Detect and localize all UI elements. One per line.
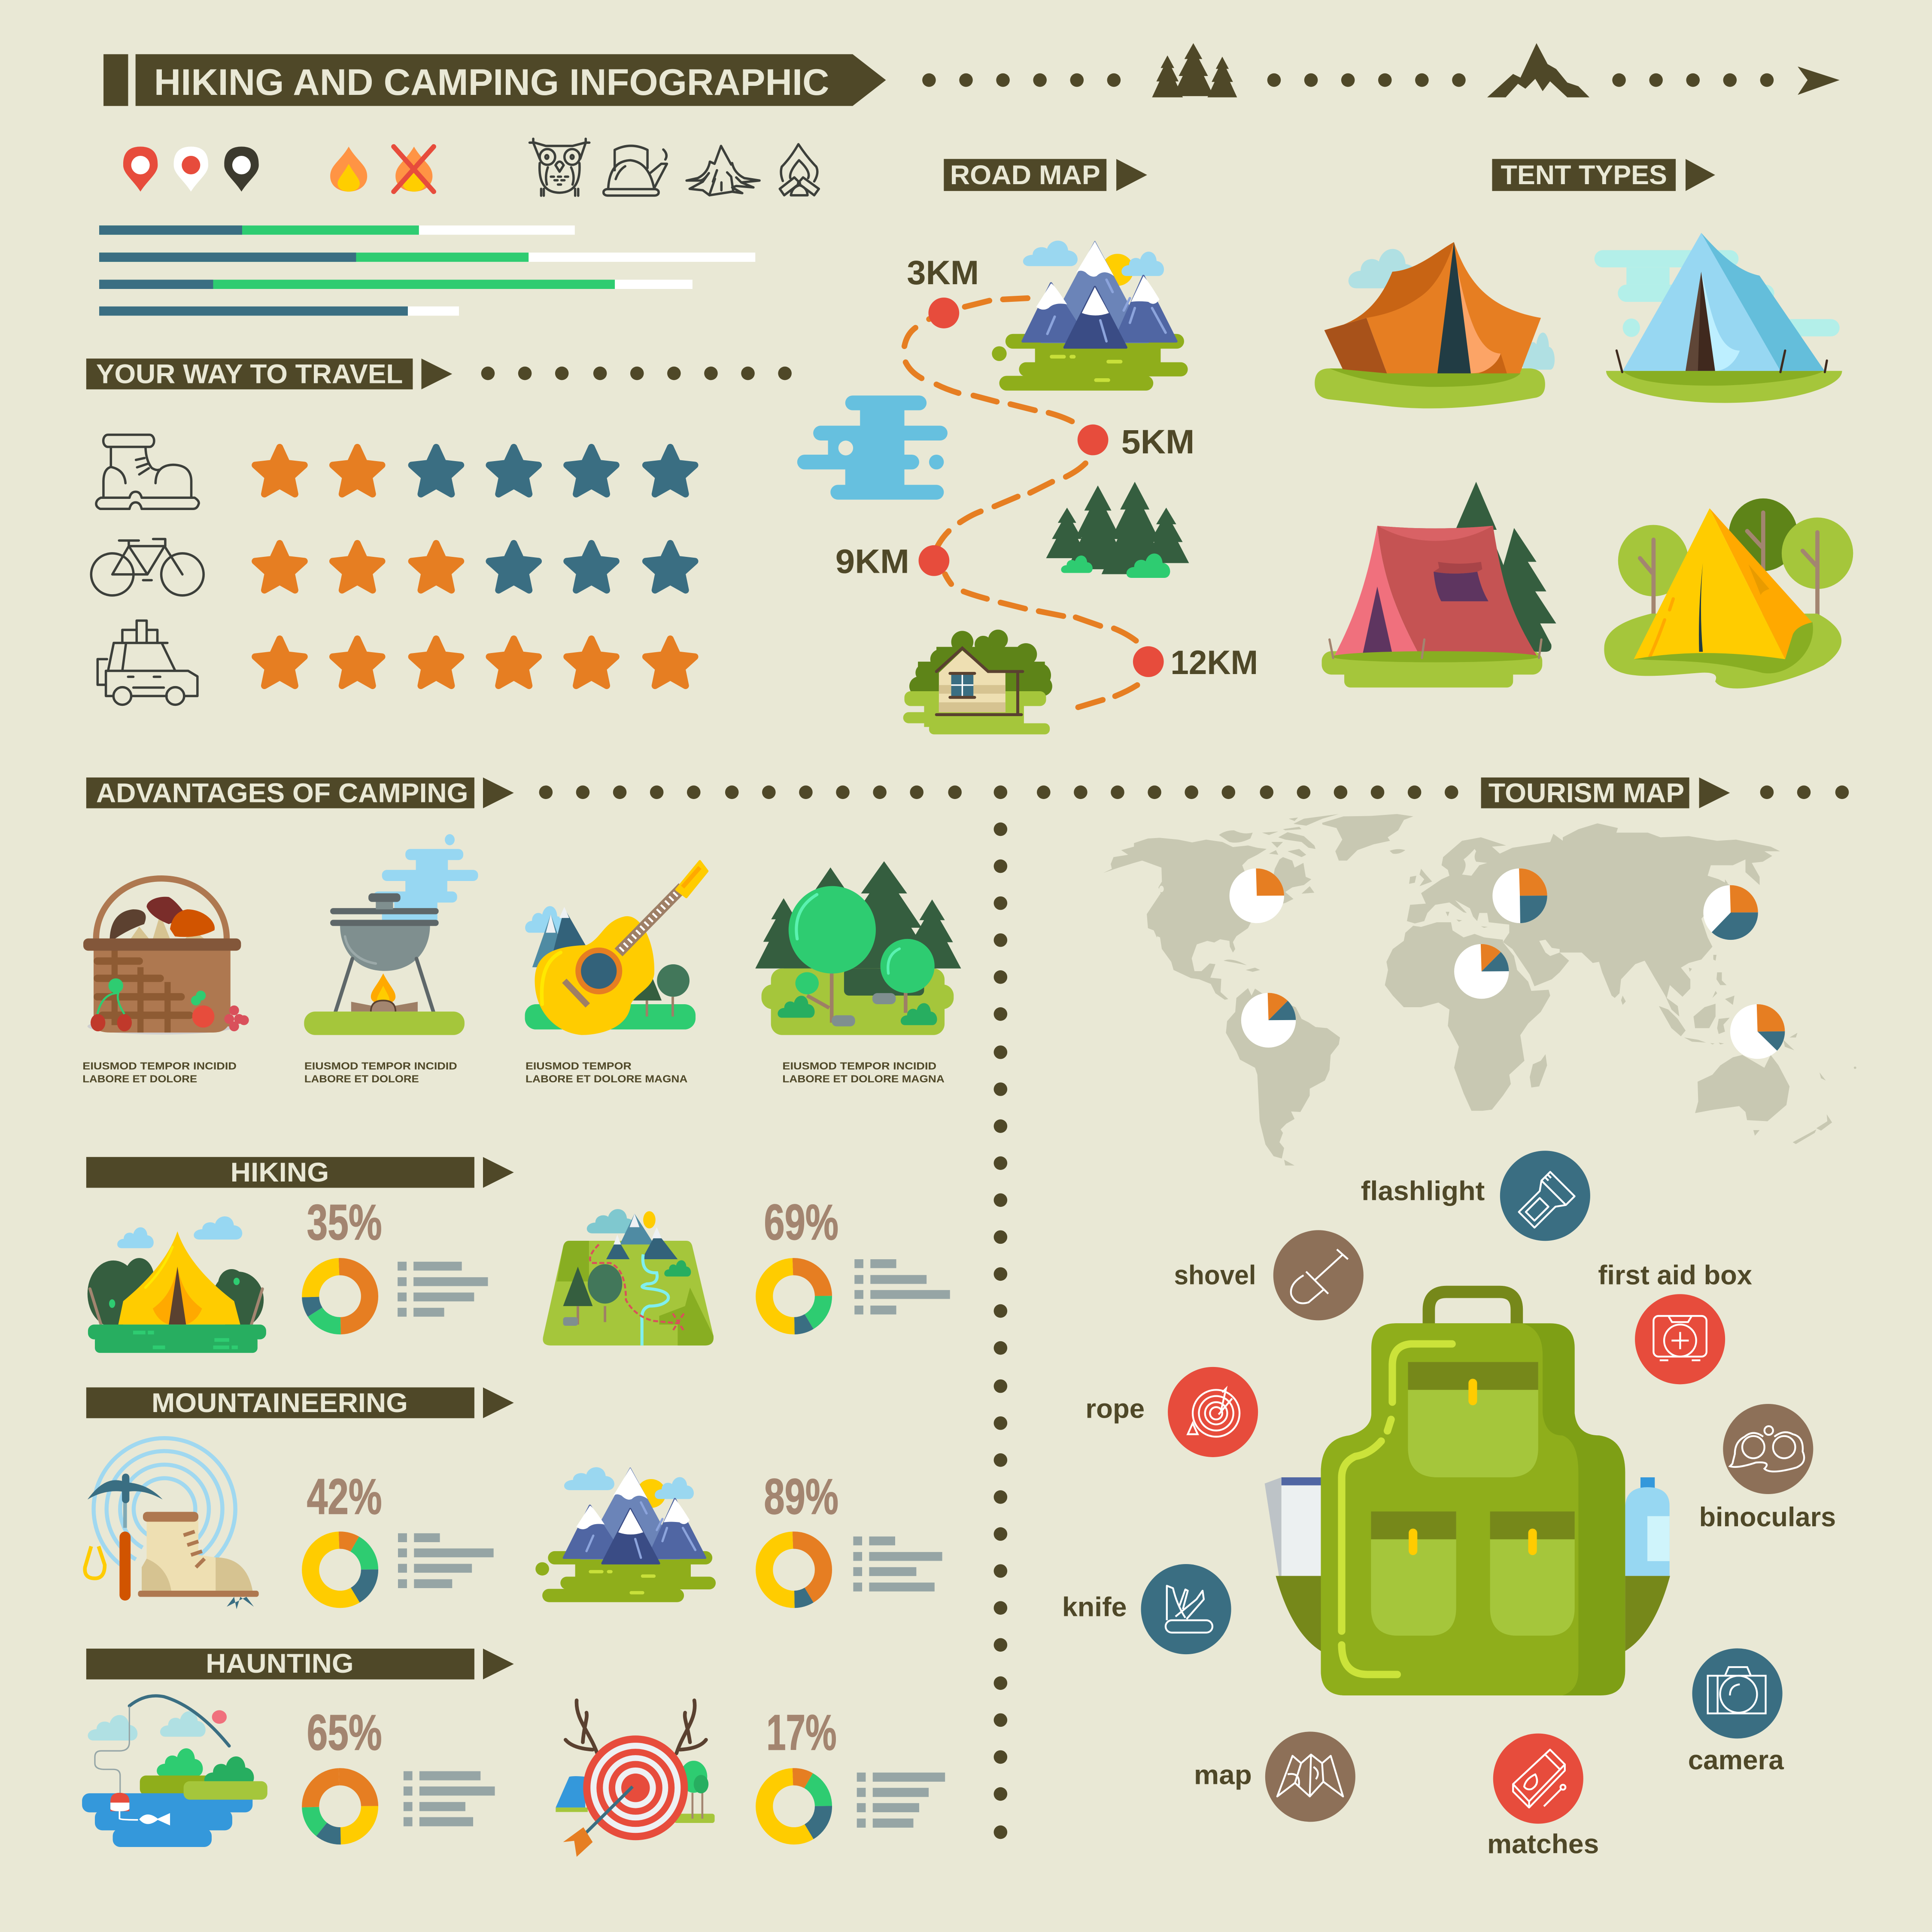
gear: first aid box xyxy=(1598,1260,1752,1384)
donut chart: 42% xyxy=(310,1540,370,1599)
captions for advantages: EIUSMOD TEMPOR INCIDID xyxy=(782,1060,936,1072)
distance labels: 12KM xyxy=(1170,644,1258,681)
heading: hiking: HIKING xyxy=(231,1157,329,1188)
distance labels: 3KM xyxy=(907,254,979,292)
donut chart: 65% xyxy=(310,1777,370,1836)
tent: blue xyxy=(1595,233,1842,403)
cabin xyxy=(903,630,1052,734)
captions for advantages: LABORE ET DOLORE MAGNA xyxy=(782,1073,945,1085)
heading: road map xyxy=(944,159,1147,191)
map pie: south america xyxy=(1255,1006,1282,1034)
star ratings xyxy=(255,447,695,686)
icon: hiking boot xyxy=(96,435,199,509)
gear: map: map xyxy=(1194,1760,1252,1790)
heading: tent types: TENT TYPES xyxy=(1501,160,1667,190)
line icons: owl, kettle, tree stump, fire xyxy=(530,139,819,196)
heading: advantages of camping: ADVANTAGES OF CAMPING xyxy=(96,778,468,808)
percentages: 89% xyxy=(764,1468,838,1525)
dotted dividers xyxy=(539,786,1849,1839)
captions for advantages: EIUSMOD TEMPOR INCIDID xyxy=(304,1060,457,1072)
heading: haunting xyxy=(86,1649,514,1680)
tent: yellow xyxy=(1604,498,1853,689)
gear: knife: knife xyxy=(1062,1592,1127,1622)
gear: shovel xyxy=(1174,1230,1364,1320)
map pie: africa xyxy=(1468,958,1495,985)
captions for advantages: EIUSMOD TEMPOR xyxy=(526,1060,632,1072)
icon: car with luggage xyxy=(97,620,197,705)
map pie: east asia xyxy=(1717,899,1744,926)
title banner xyxy=(103,54,886,106)
gear: binoculars: binoculars xyxy=(1699,1502,1836,1532)
map pie: europe xyxy=(1506,882,1534,909)
heading: hiking xyxy=(86,1157,514,1188)
donut chart: 35% xyxy=(310,1267,370,1326)
top dotted route with tree and mountain icons xyxy=(922,43,1840,97)
mountain landmark xyxy=(992,241,1188,391)
percentages xyxy=(307,1194,838,1760)
illustration: forest trees xyxy=(755,861,961,1035)
map pie: north america xyxy=(1243,882,1270,909)
gear: flashlight: flashlight xyxy=(1361,1176,1485,1206)
captions for advantages: LABORE ET DOLORE xyxy=(82,1073,197,1085)
captions for advantages: LABORE ET DOLORE xyxy=(304,1073,419,1085)
illustration: mountain scene xyxy=(535,1467,716,1602)
gear: matches xyxy=(1487,1734,1599,1859)
gear: binoculars xyxy=(1699,1404,1836,1532)
gear: camera xyxy=(1688,1648,1784,1775)
gear: matches: matches xyxy=(1487,1829,1599,1859)
backpack xyxy=(1265,1292,1670,1695)
icon: bicycle xyxy=(91,539,204,595)
illustration: target with antlers and arrow xyxy=(556,1700,715,1857)
tent: orange xyxy=(1315,242,1555,408)
dashed route xyxy=(905,298,1137,707)
campfire allowed and forbidden icons xyxy=(330,147,434,191)
progress bars xyxy=(99,225,755,316)
road map scene xyxy=(797,241,1258,734)
map pie: oceania xyxy=(1744,1018,1771,1045)
donut chart: 69% xyxy=(764,1267,823,1326)
gear: shovel: shovel xyxy=(1174,1260,1256,1290)
gear: camera: camera xyxy=(1688,1745,1784,1775)
captions for advantages: EIUSMOD TEMPOR INCIDID xyxy=(82,1060,237,1072)
map pin icons xyxy=(123,147,259,191)
donut chart: 17% xyxy=(764,1777,823,1836)
percentages: 35% xyxy=(307,1194,382,1250)
illustration: trail map xyxy=(543,1209,714,1346)
donut chart: 89% xyxy=(764,1540,823,1599)
distance labels: 9KM xyxy=(835,543,909,580)
forest xyxy=(1046,482,1189,578)
percentages: 65% xyxy=(307,1704,382,1760)
map: europe, asia, africa, oceania xyxy=(1385,823,1856,1144)
tent: red xyxy=(1322,482,1556,687)
heading: mountaineering xyxy=(86,1388,514,1418)
world map xyxy=(1103,814,1856,1166)
distance labels: 5KM xyxy=(1121,423,1194,461)
captions for advantages: LABORE ET DOLORE MAGNA xyxy=(526,1073,687,1085)
captions for advantages xyxy=(82,1060,945,1085)
route waypoints xyxy=(919,298,1164,677)
gear: first aid box: first aid box xyxy=(1598,1260,1752,1290)
illustration: hiking tent xyxy=(88,1216,266,1353)
map: americas and greenland xyxy=(1103,814,1413,1166)
heading: road map: ROAD MAP xyxy=(950,160,1100,190)
gear: rope xyxy=(1085,1367,1258,1457)
gear: map xyxy=(1194,1732,1355,1822)
title banner: HIKING AND CAMPING INFOGRAPHIC xyxy=(154,62,829,103)
illustration: mushroom basket xyxy=(83,878,249,1035)
heading: your way to travel xyxy=(86,358,792,389)
illustration: cooking pot over campfire xyxy=(304,834,478,1035)
illustration: ice axe, rope and boot xyxy=(68,1412,261,1609)
gear: rope: rope xyxy=(1085,1394,1145,1424)
lake xyxy=(797,395,948,500)
percentages: 17% xyxy=(766,1704,837,1760)
heading: mountaineering: MOUNTAINEERING xyxy=(152,1388,408,1418)
heading: tourism map: TOURISM MAP xyxy=(1488,778,1684,808)
heading: haunting: HAUNTING xyxy=(206,1649,354,1679)
illustration: guitar with mountains xyxy=(525,861,707,1035)
heading: your way to travel: YOUR WAY TO TRAVEL xyxy=(96,359,403,389)
legend bars xyxy=(398,1259,950,1828)
percentages: 69% xyxy=(764,1194,838,1250)
percentages: 42% xyxy=(307,1468,382,1525)
gear: flashlight xyxy=(1361,1151,1590,1241)
distance labels xyxy=(835,254,1258,681)
gear: knife xyxy=(1062,1564,1231,1654)
illustration: fishing scene xyxy=(82,1696,267,1847)
